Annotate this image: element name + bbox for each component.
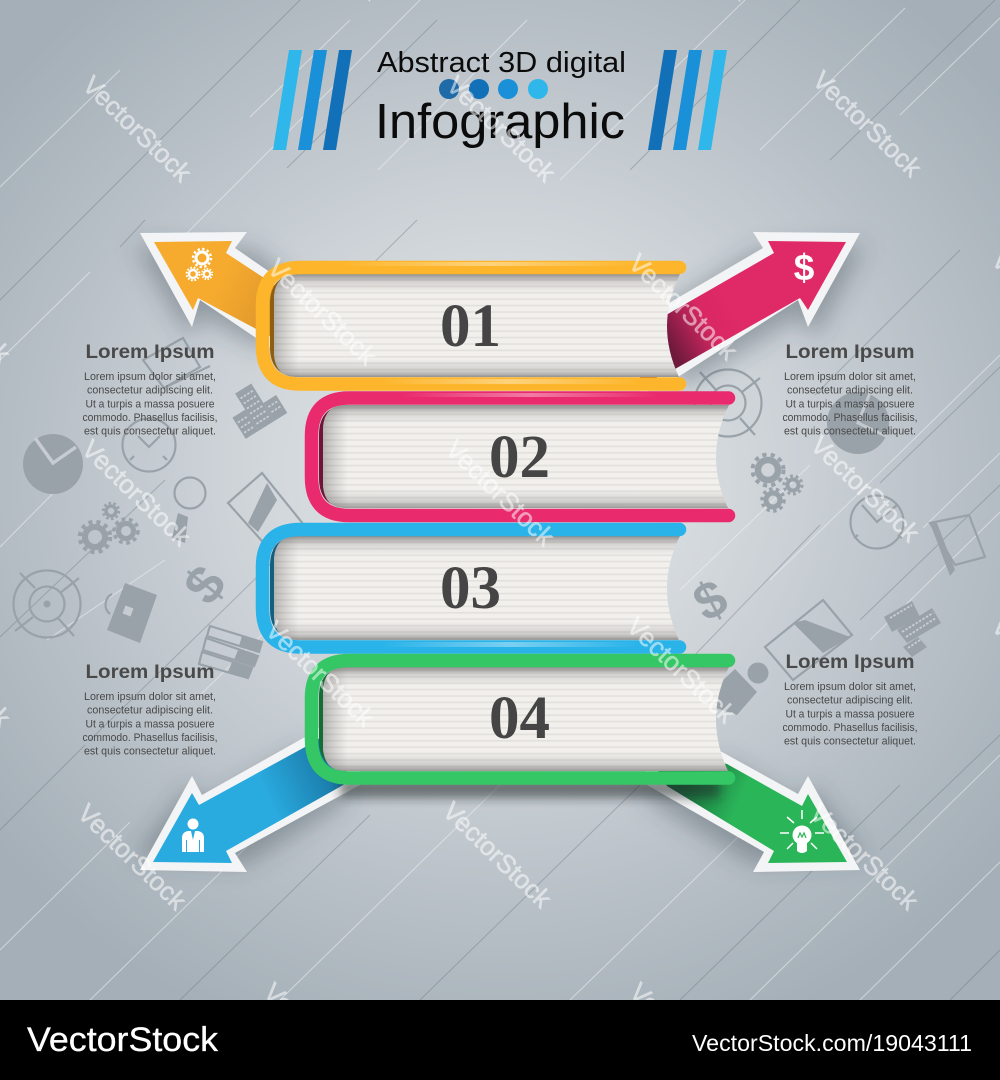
arrow: blue down-left (140, 700, 360, 872)
text block top right (782, 342, 918, 438)
icon: left tablet (228, 473, 304, 550)
title line two: Infographic (375, 95, 625, 149)
watermarks: VectorStock (804, 798, 925, 916)
text block bottom right: Ut a turpis a massa posuere (786, 708, 914, 720)
title dots (439, 79, 548, 99)
text block bottom left (82, 662, 218, 758)
watermarks: VectorStock (621, 611, 742, 729)
icon: left gears (80, 503, 138, 552)
watermarks: VectorStock (72, 798, 193, 916)
text block bottom left: Ut a turpis a massa posuere (86, 718, 214, 730)
icon: right tablet (765, 600, 852, 680)
watermarks: VectorStock (440, 434, 561, 552)
watermarks: VectorStock (441, 70, 562, 188)
text block top left: Lorem ipsum dolor sit amet, (84, 371, 216, 383)
arrow: pink up-right (640, 232, 860, 395)
icon: right buildings (884, 601, 941, 657)
text block bottom right: Lorem Ipsum (786, 652, 914, 673)
icon: right dollar: $ (684, 568, 737, 633)
footer url: VectorStock.com/19043111 (692, 1030, 972, 1056)
icon: left clock (122, 418, 176, 472)
text block bottom right: commodo. Phasellus facilisis, (782, 722, 918, 734)
text block top left (82, 342, 218, 438)
icon: person (182, 818, 204, 852)
icon: light bulb (780, 810, 824, 853)
bottom black band (0, 1000, 1000, 1080)
number 04: 04 (489, 685, 550, 752)
icon: dollar: $ (794, 247, 815, 288)
book shadows (340, 778, 720, 798)
icon: left buildings (222, 376, 287, 439)
arrow: orange up-left (140, 232, 290, 361)
icon: right laptop (930, 515, 985, 576)
text block bottom right: consectetur adipiscing elit. (787, 695, 913, 707)
text block top right: Ut a turpis a massa posuere (786, 398, 914, 410)
icon: right gears (752, 454, 802, 511)
arrow: green down-right (640, 730, 860, 872)
watermarks: VectorStock (807, 65, 928, 183)
background icons (14, 338, 985, 715)
text block top left: est quis consectetur aliquet. (84, 426, 216, 438)
title stripes left (273, 50, 352, 150)
arrow shadows (135, 245, 865, 865)
text block top right: commodo. Phasellus facilisis, (782, 412, 918, 424)
text block top right: Lorem Ipsum (786, 342, 914, 363)
icon: left pie chart (23, 434, 83, 494)
book 2: pink (312, 393, 729, 516)
title line one: Abstract 3D digital (377, 47, 626, 79)
icon: left target (14, 570, 80, 638)
text block bottom left: consectetur adipiscing elit. (87, 705, 213, 717)
icon: left folders (199, 626, 262, 678)
icon: right person (716, 662, 768, 715)
icon: left laptop (143, 338, 210, 388)
icon: right clock (850, 496, 904, 548)
watermarks: VectorStock (77, 70, 198, 188)
text block top left: consectetur adipiscing elit. (87, 385, 213, 397)
watermarks: VectorStock (437, 796, 558, 914)
watermarks: VectorStock (805, 430, 926, 548)
text block top right: consectetur adipiscing elit. (787, 385, 913, 397)
footer brand: VectorStock (27, 1021, 219, 1059)
icon: right pie chart (827, 392, 889, 454)
icon: left dollar: $ (172, 555, 238, 615)
text block bottom left: Lorem ipsum dolor sit amet, (84, 691, 216, 703)
icon: left magnifier (172, 478, 206, 543)
book 1: orange (262, 262, 680, 384)
icon: gears (187, 249, 212, 280)
text block bottom left: Lorem Ipsum (86, 662, 214, 683)
text block bottom left: est quis consectetur aliquet. (84, 746, 216, 758)
watermarks: VectorStock (623, 248, 744, 366)
text block bottom right: est quis consectetur aliquet. (784, 736, 916, 748)
text block bottom right (782, 652, 918, 748)
watermarks: VectorStock (260, 615, 381, 733)
icon: left briefcase (106, 583, 157, 643)
book 4: green (312, 660, 729, 778)
book 3: blue (262, 530, 680, 647)
text block top left: Lorem Ipsum (86, 342, 214, 363)
number 01: 01 (440, 293, 501, 360)
text block top right: Lorem ipsum dolor sit amet, (784, 371, 916, 383)
title stripes right (648, 50, 727, 150)
watermarks: VectorStock (262, 253, 383, 371)
watermarks: VectorStock (76, 434, 197, 552)
icon: right target (694, 370, 762, 436)
number 03: 03 (440, 555, 501, 622)
text block bottom left: commodo. Phasellus facilisis, (82, 732, 218, 744)
number 02: 02 (489, 424, 550, 491)
text block top left: commodo. Phasellus facilisis, (82, 412, 218, 424)
text block bottom right: Lorem ipsum dolor sit amet, (784, 681, 916, 693)
text block top right: est quis consectetur aliquet. (784, 426, 916, 438)
text block top left: Ut a turpis a massa posuere (86, 398, 214, 410)
